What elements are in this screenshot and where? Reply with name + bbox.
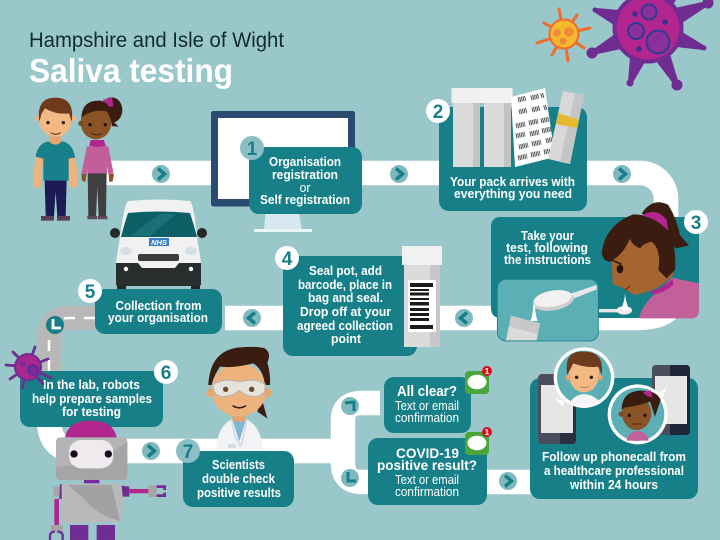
panel: step 1 registration: Self registration <box>260 193 350 207</box>
arrow: to test <box>613 165 631 183</box>
icon: right phone <box>652 365 690 435</box>
panel: step 6 lab robots <box>20 360 178 427</box>
icon: message notification: 1 <box>485 428 490 437</box>
panel: step 2 pack arrives: 2 <box>433 102 443 123</box>
panel: step 1 registration: 1 <box>247 139 258 160</box>
icon: large virus <box>586 0 714 90</box>
grey lab road <box>49 318 100 375</box>
icon: sample pots <box>452 88 512 167</box>
panel: step 7 scientists: 7 <box>183 442 193 463</box>
panel: all clear result <box>384 366 492 433</box>
panel: step 7 scientists: positive results <box>197 486 281 500</box>
inset: spoon pouring into pot <box>497 279 598 341</box>
panel: covid positive result: confirmation <box>395 485 459 499</box>
panel: step 5 collection: Collection from <box>116 299 202 313</box>
panel: step 4 seal pot: barcode, place in <box>298 278 392 292</box>
icon: NHS van: NHS <box>151 238 167 247</box>
panel: step 4 seal pot: bag and seal. <box>308 291 383 305</box>
panel: step 3 take your test: Take your <box>521 229 574 243</box>
panel: follow up phonecall <box>530 347 698 499</box>
panel: follow up phonecall: a healthcare professional <box>544 464 684 478</box>
panel: step 4 seal pot: 4 <box>282 249 293 270</box>
panel: step 2 pack arrives <box>426 88 587 211</box>
panel: step 3 take your test: 3 <box>691 213 701 234</box>
arrow: to collection <box>243 309 261 327</box>
panel: step 6 lab robots: for testing <box>62 405 121 419</box>
panel: step 4 seal pot: Seal pot, add <box>309 264 382 278</box>
panel: step 2 pack arrives: everything you need <box>454 187 572 201</box>
panel: step 5 collection: your organisation <box>108 311 208 325</box>
icon: NHS van <box>110 200 207 296</box>
panel: step 1 registration: or <box>300 181 310 195</box>
panel: step 6 lab robots: 6 <box>161 363 171 384</box>
panel: covid positive result: positive result? <box>377 457 477 473</box>
panel: step 4 seal pot <box>275 246 442 356</box>
arrow: to pack <box>390 165 408 183</box>
arrow: to follow up <box>499 472 517 490</box>
illustration: woman <box>78 97 122 219</box>
panel: all clear result: All clear? <box>397 383 457 400</box>
panel: step 1 registration <box>240 136 362 214</box>
panel: step 6 lab robots: In the lab, robots <box>43 378 140 392</box>
icon: barcode labels sheet <box>511 88 555 167</box>
panel: step 3 take your test: the instructions <box>504 253 591 267</box>
arrow: to lab <box>46 316 64 334</box>
title <box>29 29 284 89</box>
title: Saliva testing <box>29 52 233 89</box>
arrow: to positive result <box>341 469 359 487</box>
panel: step 1 registration: Organisation <box>269 155 341 169</box>
panel: all clear result: Text or email <box>395 399 459 413</box>
panel: step 3 take your test <box>491 202 708 341</box>
arrow: to registration <box>152 165 170 183</box>
panel: step 4 seal pot: Drop off at your <box>300 305 391 319</box>
panel: step 7 scientists: double check <box>202 472 275 486</box>
white route path <box>49 173 672 482</box>
panel: all clear result: confirmation <box>395 411 459 425</box>
panel: step 7 scientists <box>176 439 294 507</box>
panel: follow up phonecall: within 24 hours <box>569 478 658 492</box>
illustration: scientist <box>206 347 272 452</box>
icon: small virus <box>537 9 590 61</box>
icon: sealed bag <box>548 91 584 164</box>
panel: step 3 take your test: test, following <box>506 241 588 255</box>
icon: left phone <box>538 374 576 444</box>
panel: step 4 seal pot: agreed collection <box>297 319 393 333</box>
icon: message notification: 1 <box>485 367 490 376</box>
icon: computer monitor <box>211 111 355 232</box>
panel: step 4 seal pot: point <box>331 332 362 346</box>
panel: step 2 pack arrives: Your pack arrives with <box>450 175 575 189</box>
panel: step 1 registration: registration <box>272 168 338 182</box>
illustration: patient portrait <box>608 384 668 444</box>
panel: covid positive result <box>368 427 492 505</box>
illustration: man <box>33 98 78 221</box>
illustration: healthcare professional portrait <box>554 347 614 408</box>
illustration: woman giving saliva sample <box>599 202 699 318</box>
illustration: robot <box>50 421 165 540</box>
title: Hampshire and Isle of Wight <box>29 29 284 52</box>
arrow: to scientists <box>142 442 160 460</box>
panel: step 5 collection <box>78 279 222 334</box>
icon: lab virus <box>6 347 51 388</box>
panel: step 6 lab robots: help prepare samples <box>32 392 152 406</box>
panel: covid positive result: Text or email <box>395 473 459 487</box>
arrow: to all clear <box>341 397 359 415</box>
panel: follow up phonecall: Follow up phonecall from <box>542 450 686 464</box>
panel: step 5 collection: 5 <box>85 282 96 303</box>
icon: barcoded sample pot <box>402 246 442 347</box>
arrow: to seal pot <box>455 309 473 327</box>
panel: step 7 scientists: Scientists <box>212 458 265 472</box>
panel: covid positive result: COVID-19 <box>396 445 459 461</box>
